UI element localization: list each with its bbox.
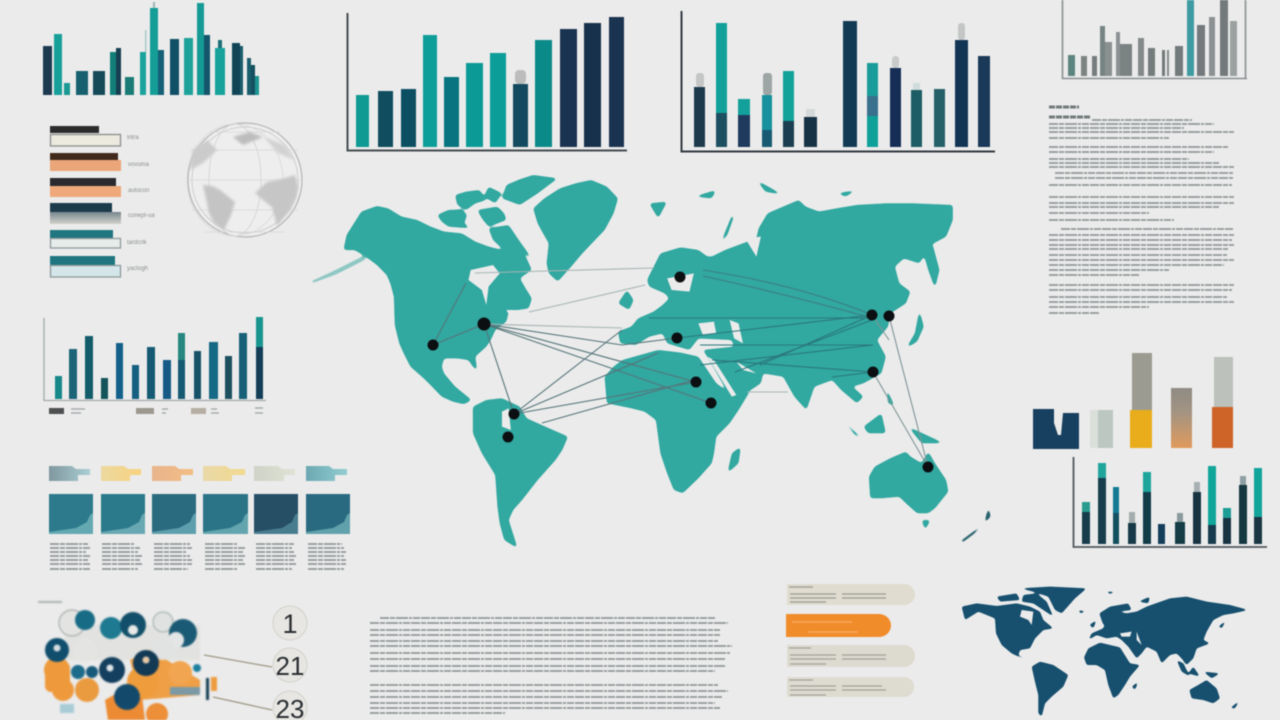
location dots <box>428 272 934 472</box>
row 1: intra <box>127 135 139 141</box>
navy notched block <box>1033 409 1079 449</box>
card 1 <box>49 466 93 569</box>
paragraph 1 <box>370 618 732 671</box>
text block: upper right <box>1049 107 1234 313</box>
pale block <box>1090 410 1113 448</box>
pill 1 <box>787 584 915 605</box>
card 2 <box>101 466 145 569</box>
bar chart: top centre right <box>682 11 995 152</box>
row 5 <box>50 230 148 248</box>
number badge 21: 21 <box>276 651 304 681</box>
axes <box>682 11 995 152</box>
pill 4 <box>787 677 914 697</box>
pill list: four labels <box>786 584 915 697</box>
bar chart: top centre left <box>348 13 627 150</box>
row 2 <box>50 153 150 171</box>
row 4 <box>50 203 155 224</box>
row 3: autocon <box>128 188 149 194</box>
card 6 <box>306 466 350 569</box>
number badge 1: 1 <box>282 609 298 639</box>
column chart: stacked block bars <box>1033 353 1233 449</box>
axes <box>348 13 627 150</box>
body copy <box>1049 120 1234 313</box>
row 6: yactogh <box>127 266 148 272</box>
connector lines from cluster to numbers <box>204 655 272 710</box>
row 5: tardcrik <box>127 240 148 246</box>
water cut-outs <box>468 237 761 430</box>
paragraph 2 <box>370 685 728 713</box>
text block: bottom centre <box>370 618 732 713</box>
card 4 <box>203 466 248 569</box>
pill 3 <box>787 645 915 667</box>
row 4: conept-ua <box>128 213 155 219</box>
red block <box>1212 357 1233 448</box>
icon: grey globe <box>187 123 302 237</box>
number badge 1 <box>273 606 307 640</box>
bar chart: lower right <box>1074 457 1267 547</box>
world map: teal with connections <box>310 175 991 548</box>
card 5 <box>254 466 298 569</box>
legend bars: horizontal stacked list <box>50 126 155 277</box>
axes <box>44 318 266 400</box>
row 3 <box>50 178 149 197</box>
bar chart: top right muted <box>1062 0 1247 78</box>
row 6 <box>50 256 148 277</box>
world map: navy bottom right <box>962 587 1248 717</box>
connection lines <box>433 268 928 467</box>
axes <box>1062 0 1247 78</box>
legend swatches <box>49 408 263 414</box>
thumbnail row: six cards <box>49 466 350 569</box>
orange fade block <box>1171 388 1192 448</box>
axes <box>1074 457 1267 547</box>
heading <box>1049 107 1091 117</box>
bar chart: top left skyline <box>43 2 259 95</box>
bar chart: middle left <box>44 317 266 414</box>
row 2: vovuma <box>128 162 150 168</box>
yellow block <box>1130 353 1152 448</box>
small caption <box>38 601 62 603</box>
row 1 <box>50 126 139 146</box>
people cluster illustration <box>38 602 217 720</box>
landmasses <box>310 175 991 548</box>
pill 2: highlighted orange <box>786 614 891 637</box>
card 3 <box>152 466 196 569</box>
